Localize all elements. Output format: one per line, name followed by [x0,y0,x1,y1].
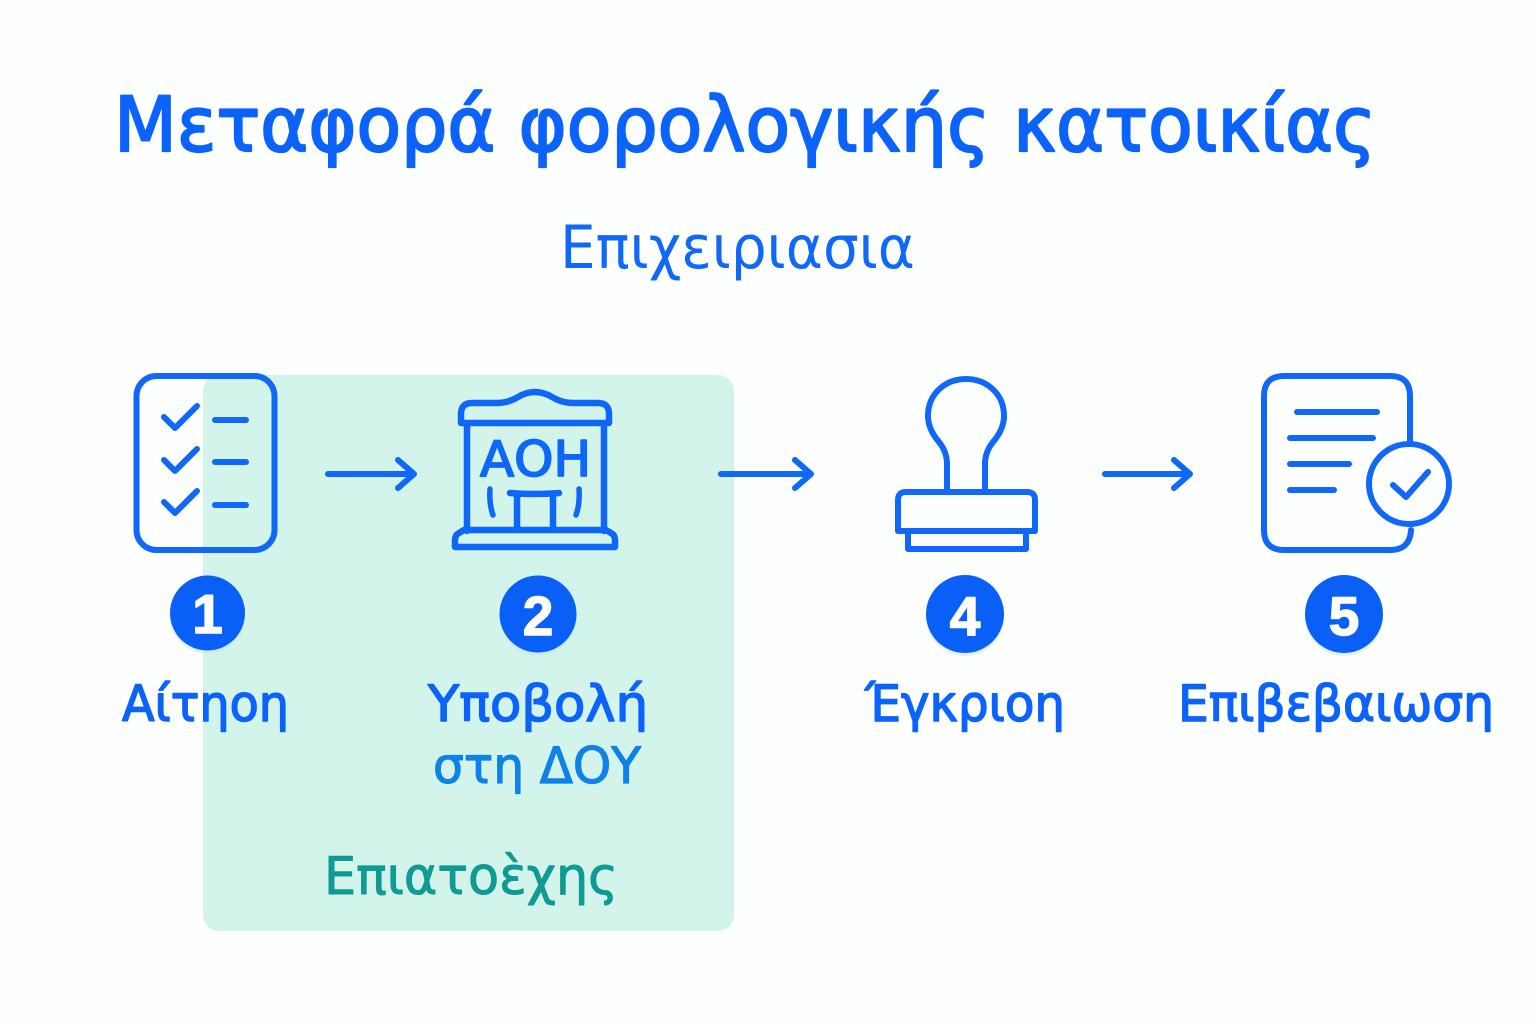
arrow: step 4 to 5 [1105,460,1190,488]
step 4 badge: 4 [950,585,981,647]
arrow: step 1 to 2 [328,460,414,488]
step 2 badge [500,576,576,656]
title: Μεταφορά φορολογικής κατοικίας [114,80,1376,169]
label: Υποβολή στη ΔΟΥ: στη ΔΟΥ [433,737,641,795]
panel label: Επιτοέχης: Επιατοὲχης [324,847,618,907]
panel: Επιτοέχης highlight [203,375,734,931]
step 5 badge: 5 [1329,585,1359,647]
icon: checklist [136,376,274,550]
icon: stamp [898,379,1035,549]
step 1 badge: 1 [192,583,223,645]
label: Υποβολή στη ΔΟΥ: Υποβολή [427,675,648,733]
step 5 badge [1305,575,1383,656]
icon: tax office building: ΑΟΗ [480,431,591,488]
step 1 badge [170,576,245,654]
step 2 badge: 2 [523,585,553,647]
subtitle: Επιχειριασια [560,213,915,283]
label: Έγκριση: Έγκριοη [864,675,1065,733]
label: Υποβολή στη ΔΟΥ [427,675,648,795]
icon: tax office building [455,392,615,547]
icon: document with check [1264,376,1449,550]
label: Αίτηση: Αίτηοη [122,675,289,733]
step 4 badge [926,575,1004,656]
label: Επιβεβαίωση: Επιβεβαιωση [1178,675,1494,733]
arrow: step 2 to 4 [721,460,811,488]
